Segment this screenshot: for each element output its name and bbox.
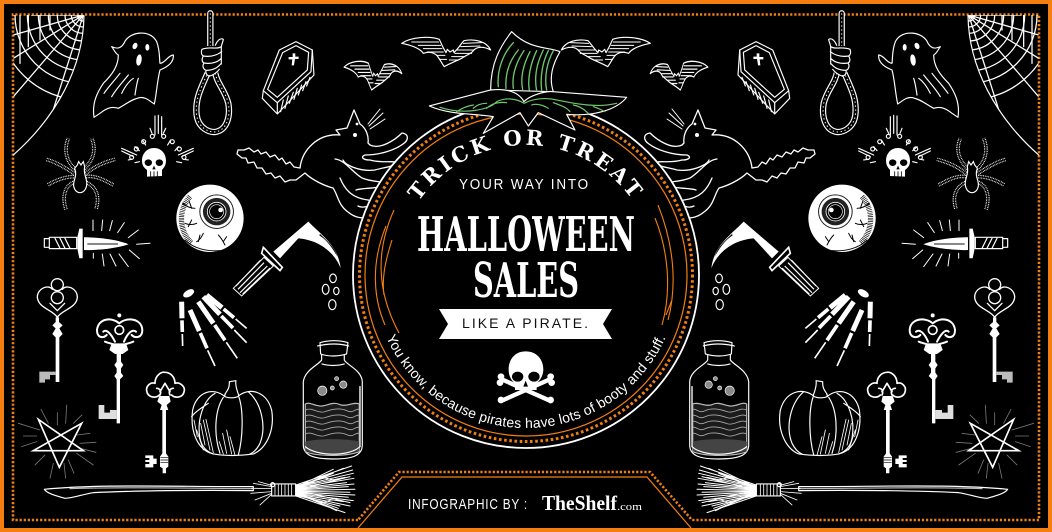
mirrored spider [937,138,1006,209]
mirrored pentagram [956,405,1034,478]
icon: pumpkin [192,381,272,455]
icon: big bat [402,37,491,67]
icon: spider web [0,0,168,155]
mirrored skull with rays [859,115,930,177]
mirrored pumpkin [780,381,860,455]
central badge rings [353,102,699,448]
icon: key two [97,313,142,423]
curved tagline: You know, because pirates have lots of booty and stuff. [388,333,666,428]
icon: broom [44,466,355,513]
mirrored skeleton hand [805,287,870,366]
icon: scythe [233,222,341,310]
mirrored web [884,0,1052,155]
icon: eyeball [176,185,244,252]
heading: trick or treat: TRICK OR TREAT [406,129,644,199]
witch hat [429,32,627,133]
mirrored cat [645,109,815,218]
mirrored coffin [738,42,790,114]
footer credit: .com [617,501,642,513]
icon: noose [196,13,229,132]
heading: sales: SALES [473,253,579,309]
icon: potion bottle [303,341,362,459]
icon: spider [46,138,115,209]
icon: skeleton hand [182,287,247,366]
heading: halloween: HALLOWEEN [417,207,635,263]
ribbon banner [439,309,612,339]
mirrored small bat [650,61,708,90]
mirrored noose [823,13,856,132]
mirrored key three [868,372,907,473]
ribbon banner: LIKE A PIRATE. [462,315,588,331]
mirrored key one [975,279,1015,383]
mirrored ghost [879,33,958,117]
mirrored scythe [711,222,819,310]
subheading: your way into: YOUR WAY INTO [459,176,590,193]
footer credit: TheShelf [542,491,618,515]
icon: skull with rays [122,115,193,177]
icon: skull and crossbones [497,351,555,403]
icon: dagger [44,220,150,267]
icon: small bat [344,61,402,90]
mirrored key two [910,313,955,423]
icon: coffin [262,42,314,114]
icon: cat [237,109,407,218]
mirrored big bat [561,37,650,67]
footer credit: INFOGRAPHIC BY : [408,496,528,513]
mirrored potion bottle [690,341,749,459]
icon: key one [37,279,77,383]
mirrored dagger [902,220,1008,267]
icon: key three [145,372,184,473]
mirrored broom [697,466,1008,513]
footer tab solid line [358,477,691,528]
footer credit [408,491,642,515]
icon: pentagram [18,405,96,478]
icon: ghost [94,33,173,117]
mirrored eyeball [808,185,876,252]
